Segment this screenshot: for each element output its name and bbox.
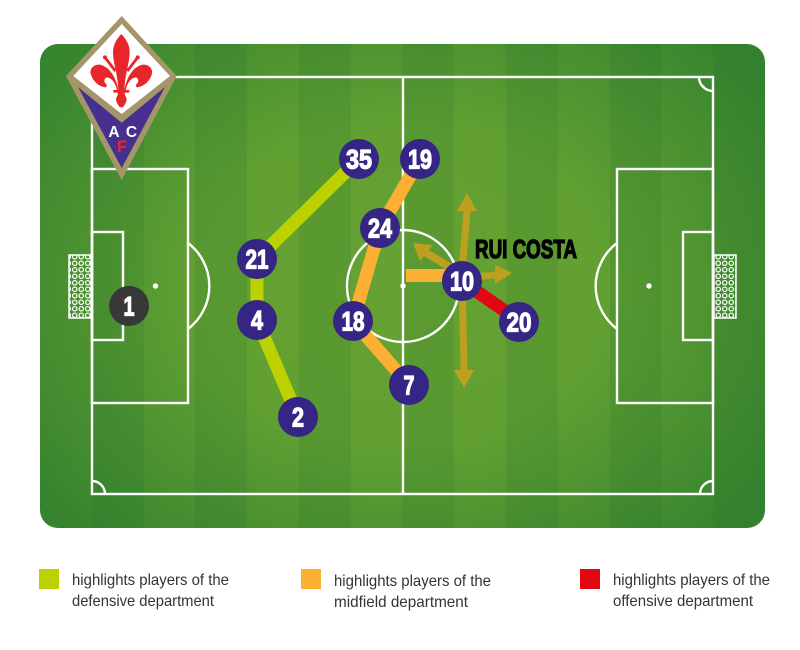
club crest: F: [117, 138, 127, 156]
club crest: C: [126, 124, 137, 141]
player 2: [278, 397, 318, 437]
legend: defensive: [39, 569, 229, 610]
player 35: [339, 139, 379, 179]
player 10: [442, 261, 482, 301]
pitch markings: [92, 77, 713, 494]
arrow: right: [478, 265, 512, 284]
darker mowing stripes: [92, 44, 765, 528]
legend: defensive: highlights players of the: [72, 572, 229, 589]
player 18: 18: [342, 306, 364, 336]
legend: midfield: highlights players of the: [334, 573, 491, 590]
goalkeeper 1: 1: [124, 292, 134, 322]
player 24: 24: [368, 214, 392, 244]
club crest: [66, 16, 177, 180]
panel: football pitch: [40, 44, 765, 528]
player 20: 20: [506, 308, 532, 338]
crest white diamond: [73, 24, 170, 114]
player name label: RUI COSTA: [475, 234, 577, 264]
fleur-de-lis: [91, 34, 152, 107]
player 7: 7: [404, 370, 414, 400]
goalkeeper 1: [109, 286, 149, 326]
arrow: down: [454, 298, 474, 388]
offensive department link: [462, 281, 519, 321]
player 24: [360, 208, 400, 248]
player 19: 19: [408, 144, 432, 174]
pitch grass background: [40, 44, 765, 528]
left goal: [69, 255, 91, 318]
player 21: 21: [246, 244, 268, 274]
player 7: [389, 365, 429, 405]
legend: midfield: [301, 569, 491, 611]
player 4: 4: [251, 306, 263, 336]
player 2: 2: [292, 402, 304, 432]
crest outer frame: [66, 16, 177, 180]
player 10: 10: [450, 266, 474, 296]
player 18: [333, 301, 373, 341]
movement arrows of player 10: [413, 193, 512, 388]
legend: midfield: midfield department: [334, 594, 469, 611]
legend: offensive: [580, 569, 770, 610]
legend: offensive: highlights players of the: [613, 572, 770, 589]
player 35: 35: [346, 144, 372, 174]
defensive department links: [257, 159, 359, 417]
arrow: up: [457, 193, 477, 265]
crest letters: A: [108, 124, 120, 141]
player 19: [400, 139, 440, 179]
player 21: [237, 239, 277, 279]
crest blue shield: [78, 87, 165, 168]
spots: [153, 283, 652, 289]
player 4: [237, 300, 277, 340]
player 20: [499, 302, 539, 342]
arrow: up-left: [413, 243, 452, 270]
legend: offensive: offensive department: [613, 593, 754, 610]
right goal: [714, 255, 736, 318]
midfield department links: [353, 159, 462, 385]
legend: defensive: defensive department: [72, 593, 215, 610]
